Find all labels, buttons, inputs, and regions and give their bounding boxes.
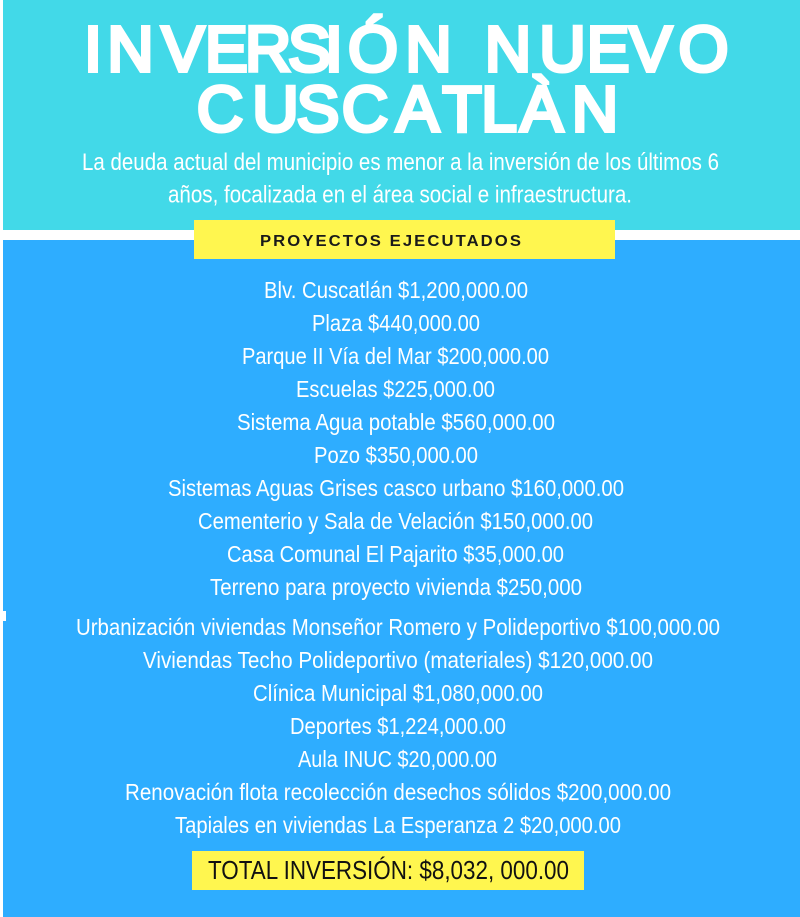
project list: Escuelas $225,000.00 [296, 376, 495, 402]
project list: Plaza $440,000.00 [312, 310, 480, 336]
project list: Sistema Agua potable $560,000.00 [237, 409, 555, 435]
project list: Deportes $1,224,000.00 [290, 713, 506, 739]
project list: Aula INUC $20,000.00 [298, 746, 497, 772]
heading banner: proyectos ejecutados [194, 220, 615, 259]
project list: Blv. Cuscatlán $1,200,000.00 [264, 277, 528, 303]
project list: Urbanización viviendas Monseñor Romero y Polideportivo $100,000.00 [76, 614, 720, 640]
subtitle text [82, 149, 719, 208]
project list: Parque II Vía del Mar $200,000.00 [242, 343, 549, 369]
project list: Sistemas Aguas Grises casco urbano $160,000.00 [168, 475, 624, 501]
panel: projects background [3, 240, 800, 917]
project list: Clínica Municipal $1,080,000.00 [253, 680, 543, 706]
total investment banner: TOTAL INVERSIÓN: $8,032, 000.00 [208, 855, 569, 885]
project list [76, 277, 720, 838]
title: INVERSIÓN NUEVO [84, 13, 728, 85]
subtitle text: años, focalizada en el área social e infraestructura. [168, 182, 632, 208]
project list: Viviendas Techo Polideportivo (materiales) $120,000.00 [143, 647, 653, 673]
heading banner: proyectos ejecutados: PROYECTOS EJECUTADOS [260, 233, 523, 250]
panel: header background [3, 0, 800, 230]
project list: Renovación flota recolección desechos sólidos $200,000.00 [125, 779, 671, 805]
project list: Terreno para proyecto vivienda $250,000 [210, 574, 582, 600]
title: CUSCATLÀN [197, 73, 618, 145]
total investment banner [192, 851, 584, 890]
project list: Pozo $350,000.00 [314, 442, 478, 468]
project list: Casa Comunal El Pajarito $35,000.00 [227, 541, 564, 567]
title [84, 13, 728, 145]
project list: Cementerio y Sala de Velación $150,000.00 [198, 508, 593, 534]
project list: Tapiales en viviendas La Esperanza 2 $20,000.00 [175, 812, 621, 838]
